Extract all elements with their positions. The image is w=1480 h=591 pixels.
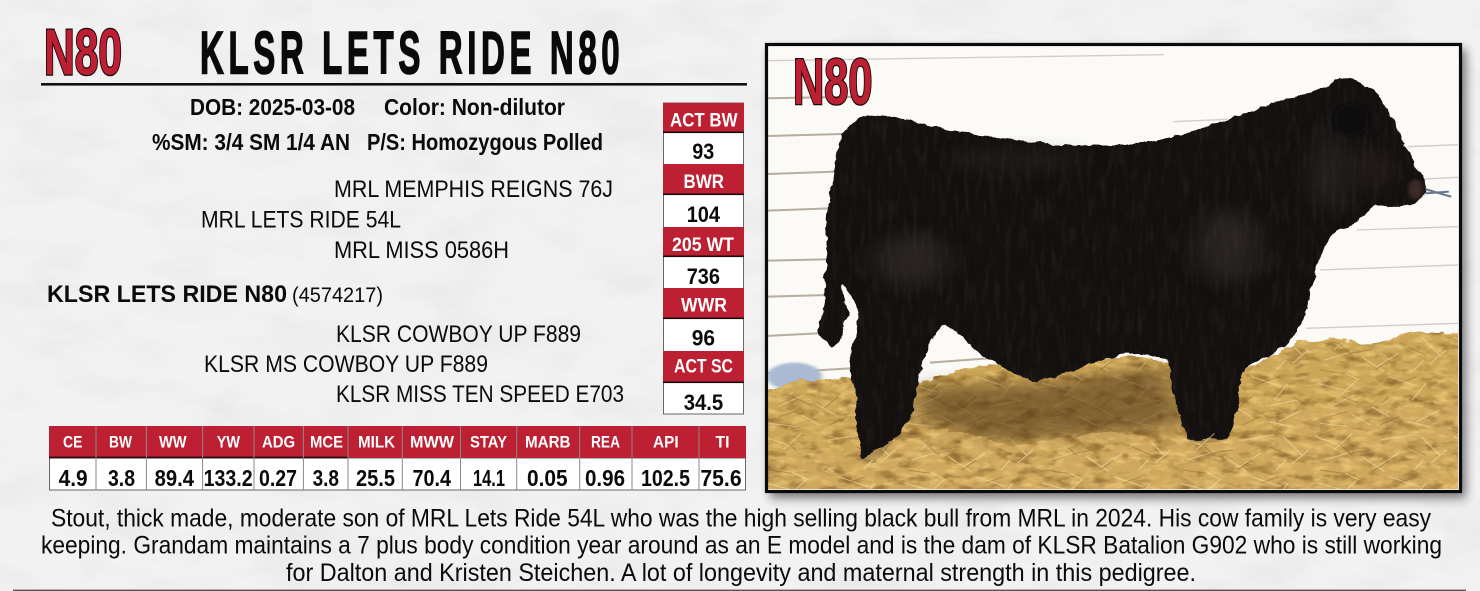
pedigree: MRL LETS RIDE 54L (201, 206, 401, 234)
EPD headers: REA (591, 433, 620, 452)
bull silhouette (817, 78, 1426, 464)
EPD values: 0.27 (259, 465, 297, 491)
description paragraph: for Dalton and Kristen Steichen. A lot of longevity and maternal strength in this pedigree. (286, 559, 1196, 587)
EPD values: 14.1 (473, 465, 505, 491)
side table: actual measures: ACT SC (674, 357, 733, 378)
pedigree (47, 176, 624, 408)
pedigree: MRL MISS 0586H (334, 237, 509, 264)
EPD headers: BW (109, 433, 133, 452)
straw shadow (916, 367, 1187, 443)
halter wisp (1426, 189, 1451, 197)
EPD table (49, 426, 746, 491)
heading: bull name: KLSR LETS RIDE N80 (200, 20, 620, 87)
side table: actual measures: 93 (692, 139, 714, 164)
side table: actual measures: 205 WT (672, 235, 734, 256)
side table: actual measures: 96 (692, 326, 715, 351)
side table: actual measures: BWR (684, 172, 724, 193)
EPD headers: MCE (310, 433, 343, 452)
EPD values (59, 465, 742, 491)
birth and color info: %SM: 3/4 SM 1/4 AN (152, 129, 350, 155)
ear (1334, 103, 1369, 137)
header rule (41, 83, 747, 86)
muzzle (1408, 179, 1423, 199)
EPD values: 75.6 (700, 465, 742, 491)
EPD values: 70.4 (412, 465, 451, 491)
EPD values: 25.5 (356, 465, 395, 491)
pedigree: (4574217) (292, 284, 383, 307)
EPD headers: ADG (262, 433, 295, 452)
description paragraph (41, 504, 1442, 587)
EPD headers: STAY (470, 433, 508, 452)
EPD values: 0.96 (585, 465, 625, 491)
side table: actual measures: ACT BW (670, 110, 738, 132)
straw strands (768, 336, 1458, 466)
EPD values: 3.8 (313, 465, 339, 491)
side table: actual measures: 736 (687, 264, 720, 289)
EPD headers: API (653, 433, 679, 452)
pedigree: MRL MEMPHIS REIGNS 76J (334, 176, 613, 203)
side table: actual measures: 104 (687, 202, 721, 227)
pedigree: KLSR MISS TEN SPEED E703 (336, 381, 624, 408)
birth and color info (152, 94, 603, 155)
EPD headers: YW (217, 433, 241, 452)
straw bedding (765, 332, 1463, 497)
EPD headers (63, 433, 730, 452)
EPD values: 4.9 (59, 465, 88, 491)
tail (817, 243, 848, 350)
heading: lot number: N80 (44, 16, 122, 88)
EPD headers: WW (159, 433, 187, 452)
EPD headers: MARB (525, 433, 570, 452)
EPD headers: CE (63, 433, 82, 452)
pedigree: KLSR LETS RIDE N80 (47, 281, 287, 308)
pedigree: KLSR COWBOY UP F889 (336, 321, 581, 348)
EPD values: 3.8 (108, 465, 135, 491)
EPD headers: TI (716, 433, 730, 452)
wall planks (767, 55, 1458, 373)
birth and color info: P/S: Homozygous Polled (367, 129, 603, 155)
EPD values: 0.05 (527, 465, 568, 491)
bull body (826, 78, 1426, 464)
side table: actual measures: WWR (681, 296, 727, 317)
birth and color info: Color: Non-dilutor (384, 94, 565, 120)
foreground strands (765, 403, 1463, 497)
side table: actual measures: 34.5 (684, 390, 723, 415)
EPD values: 102.5 (641, 465, 690, 491)
straw foreground (765, 400, 1463, 497)
photo panel: bull in straw (765, 44, 1466, 498)
snow patch (767, 363, 822, 391)
birth and color info: DOB: 2025-03-08 (190, 94, 355, 120)
side table: actual measures (663, 103, 744, 415)
coat highlights (875, 133, 1391, 287)
pedigree: KLSR MS COWBOY UP F889 (204, 351, 488, 378)
EPD values: 89.4 (155, 465, 194, 491)
bottom rule (13, 590, 1466, 591)
photo lot number: N80 (793, 45, 872, 118)
EPD headers: MWW (410, 433, 455, 452)
EPD values: 133.2 (204, 465, 253, 491)
EPD headers: MILK (358, 433, 396, 452)
